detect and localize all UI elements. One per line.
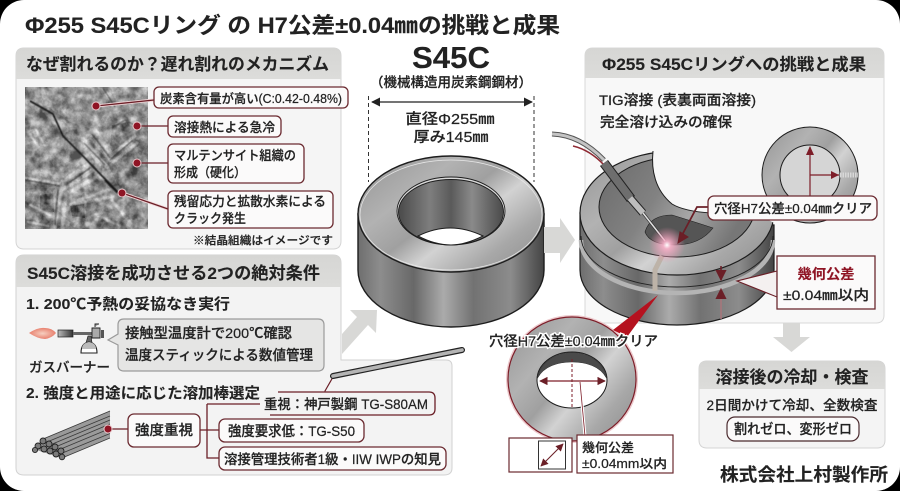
callout: carbon content [92, 87, 348, 110]
dimensions text [406, 111, 495, 146]
callout: residual stress [118, 189, 333, 228]
bottom ring inset [507, 316, 637, 442]
bubble: temperature control [108, 319, 324, 371]
arrow: conditions to ring [342, 310, 377, 354]
panel: two absolute conditions [16, 255, 462, 475]
callout: bore tolerance: 穴径H7公差±0.04㎜クリア [714, 201, 872, 216]
callout: martensite: 形成（硬化） [174, 165, 246, 180]
panel heading: conditions: S45C溶接を成功させる2つの絶対条件 [27, 263, 320, 283]
weld seam [655, 256, 662, 291]
option: TG-S50 [219, 419, 364, 442]
condition 2 heading: 2. 強度と用途に応じた溶加棒選定 [26, 384, 260, 402]
cooling text: 2日間かけて冷却、全数検査 [706, 397, 878, 413]
icon: TIG torch [552, 134, 685, 263]
material heading: S45C [412, 40, 490, 75]
panel heading: cooling: 溶接後の冷却・検査 [716, 367, 868, 387]
callout: geometric tolerance [737, 256, 875, 309]
callout: rapid cooling [133, 116, 281, 137]
image note: ※結晶組織はイメージです [193, 233, 333, 247]
icon: filler rod bundle [32, 411, 110, 460]
dimensions text: 厚み145㎜ [414, 130, 489, 146]
title: Φ255 S45Cリング の H7公差±0.04㎜の挑戦と成果 [25, 13, 560, 38]
condition 1 heading: 1. 200℃予熱の妥協なき実行 [26, 295, 230, 313]
burner label: ガスバーナー [29, 360, 110, 375]
callout: geometric tolerance: ±0.04㎜以内 [783, 287, 869, 303]
marker and strength box: 強度重視 [135, 422, 193, 438]
S45C ring [358, 156, 544, 327]
panel heading: conditions [16, 255, 341, 287]
geometric tolerance label: 幾何公差 [582, 440, 634, 455]
dimension arrow [368, 96, 534, 182]
panel heading: result: Φ255 S45Cリングへの挑戦と成果 [602, 54, 867, 74]
option: high strength TG-S80AM [264, 392, 435, 415]
material heading: （機械構造用炭素鋼鋼材） [370, 75, 532, 90]
callout: residual stress: 残留応力と拡散水素による [174, 194, 326, 209]
welded ring [580, 130, 790, 325]
icon: single filler rod [325, 350, 462, 391]
panel: cooling and inspection [699, 361, 885, 448]
tolerance arrows on ring [720, 266, 722, 319]
bubble: temperature control: 温度スティックによる数値管理 [125, 347, 313, 363]
pill: zero cracks: 割れゼロ、変形ゼロ [734, 421, 852, 437]
panel heading: mechanism: なぜ割れるのか？遅れ割れのメカニズム [26, 54, 329, 74]
company name: 株式会社上村製作所 [720, 465, 888, 485]
TIG text [599, 92, 756, 130]
option: high strength TG-S80AM: 重視：神戸製鋼 TG-S80AM [264, 397, 428, 412]
geometric tolerance label [577, 435, 673, 473]
connector lines [200, 404, 260, 458]
TIG text: 完全溶け込みの確保 [600, 114, 732, 130]
callout: carbon content: 炭素含有量が高い(C:0.42-0.48%) [160, 91, 342, 106]
inset: bore circle [762, 127, 858, 223]
arrow: ring to welding [544, 218, 575, 263]
option: welding engineer: 溶接管理技術者1級・IIW IWPの知見 [224, 451, 441, 467]
callout: rapid cooling: 溶接熱による急冷 [174, 120, 275, 135]
geometric tolerance label: ±0.04mm以内 [582, 456, 667, 471]
callout: bore tolerance [678, 196, 877, 243]
material heading [370, 40, 532, 90]
panel: why it cracks [16, 48, 348, 249]
panel: challenge and result [585, 48, 884, 323]
icon: gas burner [29, 324, 104, 353]
micrograph image [25, 87, 148, 229]
panel heading: mechanism [16, 48, 341, 79]
arrow: down to inspection [773, 323, 810, 352]
callout: martensite: マルテンサイト組織の [174, 148, 296, 163]
dimensions text: 直径Φ255㎜ [406, 111, 495, 128]
panel heading: cooling [699, 361, 885, 389]
option: welding engineer [219, 447, 446, 470]
bubble: temperature control: 接触型温度計で200℃確認 [125, 325, 292, 341]
pill: zero cracks [727, 417, 859, 441]
marker and strength box [104, 414, 200, 447]
option: TG-S50: 強度要求低：TG-S50 [228, 423, 355, 439]
bore tolerance label: 穴径H7公差±0.04㎜クリア [489, 333, 658, 349]
red wedge pointer [613, 295, 658, 337]
geometric tolerance symbol [509, 438, 572, 472]
TIG text: TIG溶接 (表裏両面溶接) [599, 92, 756, 108]
callout: residual stress: クラック発生 [174, 211, 246, 226]
bore tolerance label: 穴径H7公差±0.04㎜クリア [489, 333, 658, 349]
callout: martensite [133, 144, 304, 183]
panel heading: result [585, 48, 884, 78]
callout: geometric tolerance: 幾何公差 [798, 266, 854, 282]
